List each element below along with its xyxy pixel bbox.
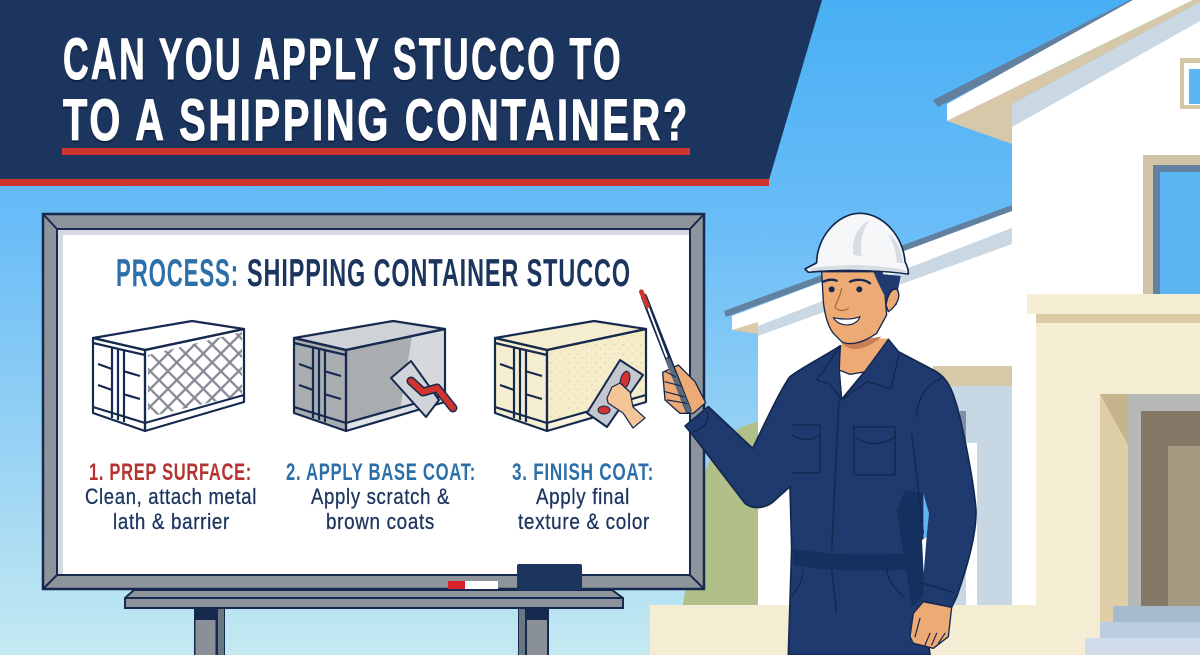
step 1 text: 1. PREP SURFACE: [89, 459, 252, 486]
step 2 text: Apply scratch & [311, 484, 450, 509]
whiteboard stand [125, 590, 623, 655]
step 3 text [512, 459, 654, 534]
red and white marker [448, 581, 498, 589]
step 3 text: 3. FINISH COAT: [512, 459, 654, 486]
title [63, 27, 690, 153]
trowel and hand [587, 360, 645, 428]
raised hand [663, 365, 706, 413]
title: CAN YOU APPLY STUCCO TO [63, 27, 623, 92]
main window [1143, 155, 1200, 294]
ground strip [650, 605, 1050, 655]
step 1 text [85, 459, 257, 534]
board heading: PROCESS: [116, 252, 239, 295]
step 1 text: Clean, attach metal [85, 484, 257, 509]
white shirt [839, 370, 864, 399]
step 2 text [286, 459, 476, 534]
low house wing [724, 205, 1012, 605]
step 3 text: Apply final [536, 484, 630, 509]
neck [839, 337, 888, 376]
hard hat [805, 213, 908, 274]
stand legs [194, 608, 549, 655]
board heading [116, 252, 631, 295]
worker [641, 213, 976, 655]
step 1 text: lath & barrier [113, 509, 230, 534]
title underline [62, 148, 690, 155]
upper window [1180, 58, 1200, 109]
belt [793, 548, 922, 571]
collar [817, 339, 899, 400]
porch [1027, 294, 1200, 655]
icon: container with base coat and trowel [294, 321, 453, 431]
green bush [683, 422, 758, 605]
eraser [517, 564, 582, 590]
lower hand [910, 602, 952, 648]
pointer [641, 292, 688, 410]
whiteboard [43, 214, 704, 590]
coverall seams and pockets [693, 378, 953, 613]
title: TO A SHIPPING CONTAINER? [63, 88, 690, 153]
step 3 text: texture & color [518, 509, 650, 534]
icon: container with finish coat and hand [495, 321, 646, 431]
coverall body [685, 339, 976, 655]
porch steps [1085, 606, 1200, 655]
marker tray [125, 590, 623, 608]
main house [933, 0, 1200, 605]
title banner [0, 0, 822, 186]
step 2 text: brown coats [326, 509, 435, 534]
step 2 text: 2. APPLY BASE COAT: [286, 459, 476, 486]
icon: container with metal lath [93, 321, 244, 431]
trowel [391, 361, 453, 417]
head [822, 272, 901, 344]
board heading: SHIPPING CONTAINER STUCCO [247, 252, 631, 295]
